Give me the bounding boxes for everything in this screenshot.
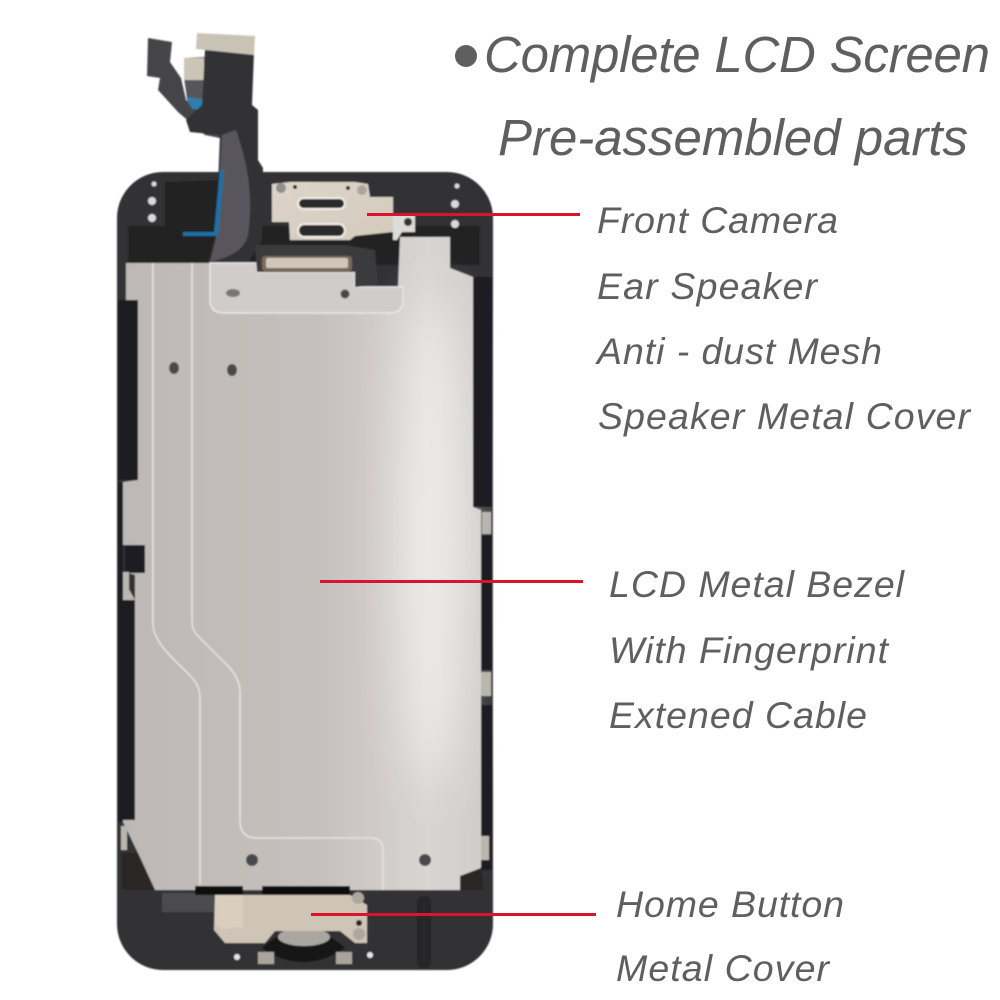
- label group: LCD bezel parts: [609, 563, 906, 736]
- raised panel: [210, 263, 403, 313]
- plate holes: [169, 289, 431, 866]
- label: Anti - dust Mesh: [595, 330, 882, 372]
- title line 1: Complete LCD Screen: [484, 26, 990, 83]
- label group: home button parts: [616, 883, 844, 989]
- label: LCD Metal Bezel: [609, 563, 906, 605]
- label: Ear Speaker: [597, 265, 818, 307]
- pointer line: home button: [311, 913, 596, 916]
- metal plate: [122, 237, 481, 890]
- home button metal cover: [214, 895, 367, 943]
- pointer line: LCD metal bezel: [320, 580, 583, 583]
- phone frame: [117, 172, 493, 970]
- label: Home Button: [616, 883, 844, 925]
- phone assembly photo: [117, 33, 493, 970]
- label: Speaker Metal Cover: [598, 395, 972, 437]
- label: With Fingerprint: [609, 629, 890, 671]
- plate trace lines: [153, 263, 383, 890]
- display connector: [255, 245, 378, 287]
- pointer line: front camera: [367, 213, 580, 216]
- flex cable: [147, 33, 263, 262]
- side clips: [121, 512, 491, 860]
- title: complete LCD screen: [455, 26, 990, 83]
- label: Extened Cable: [609, 694, 867, 736]
- bullet: [455, 45, 477, 67]
- top corner screw holes: [148, 182, 460, 228]
- front camera metal bracket: [272, 182, 415, 240]
- home button assembly: [162, 886, 431, 968]
- label: Metal Cover: [616, 947, 830, 989]
- side slots: [118, 277, 492, 890]
- title: pre-assembled parts: Pre-assembled parts: [498, 109, 968, 166]
- speaker recess: [417, 896, 431, 968]
- label group: front camera parts: [595, 199, 972, 437]
- frame top dark areas: [128, 180, 480, 265]
- plate highlight: [400, 290, 464, 790]
- label: Front Camera: [597, 199, 838, 241]
